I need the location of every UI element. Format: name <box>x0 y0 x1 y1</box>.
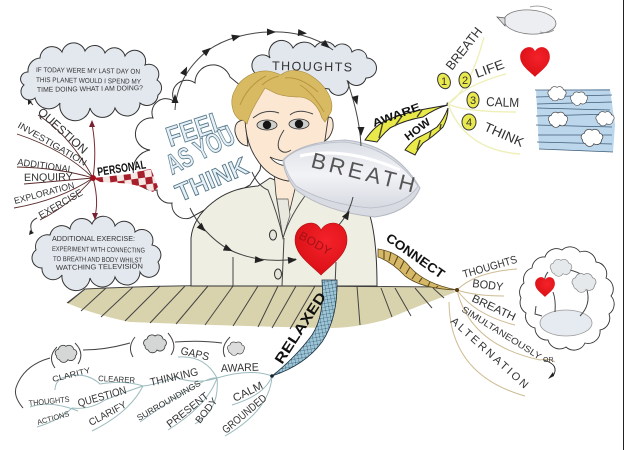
relaxed labels: GAPS <box>179 345 210 363</box>
teal branches <box>30 357 272 436</box>
numbered circles <box>435 71 479 130</box>
gold branches <box>449 269 555 396</box>
exercise text: ADDITIONAL EXERCISE: <box>52 236 135 243</box>
floor <box>67 285 456 329</box>
exercise text: WATCHING TELEVISION <box>56 263 143 272</box>
exercise text: TO BREATH AND BODY WHILST <box>53 256 143 265</box>
scaled ribbon <box>272 280 337 376</box>
panel: question cloud <box>21 43 162 121</box>
connect labels <box>448 254 554 391</box>
personal branch labels: QUESTION <box>35 105 90 157</box>
personal branch labels: EXPLORATION <box>13 180 75 206</box>
person <box>191 70 377 286</box>
brackets with thought clouds and connecting line <box>15 333 245 408</box>
relaxed labels: ACTIONS <box>36 409 70 427</box>
personal branch labels: ADDITIONAL <box>17 157 74 176</box>
label: BREATH: BREATH <box>309 148 418 197</box>
branch: aware how: 3 <box>470 95 476 107</box>
cloud: Feel As You Think <box>133 65 270 219</box>
personal branch labels: EXERCISE <box>37 187 85 222</box>
cycle arrows <box>172 28 364 264</box>
label: HOW: HOW <box>403 116 433 143</box>
face <box>245 78 330 181</box>
panel: additional exercise cloud <box>32 216 161 291</box>
relaxed labels <box>28 345 269 436</box>
relaxed labels: CLARITY <box>51 366 92 384</box>
icon: small heart <box>520 47 550 77</box>
how labels: THINK <box>482 119 527 150</box>
connect labels: SIMULTANEOUSLY <box>460 304 543 361</box>
branch: aware how <box>365 24 527 155</box>
how labels: LIFE <box>473 56 507 81</box>
arrow ribbon: aware <box>365 105 448 142</box>
label: RELAXED: RELAXED <box>271 289 329 367</box>
image border: right edge <box>623 0 624 450</box>
label: CONNECT: CONNECT <box>383 230 448 281</box>
collar and neck <box>274 172 299 238</box>
question text <box>36 67 143 94</box>
branch: aware how: 4 <box>466 117 472 129</box>
arrowheads <box>172 28 364 264</box>
connect labels: BREATH <box>470 293 517 324</box>
ears <box>235 117 333 146</box>
connect labels: ALTERNATION <box>448 315 530 391</box>
relaxed labels: CALM <box>231 380 265 405</box>
branch: connect <box>378 230 555 396</box>
relaxed labels: PRESENT <box>164 390 212 430</box>
label: AWARE: AWARE <box>371 101 422 130</box>
how labels <box>443 24 527 150</box>
personal branch labels: INVESTIGATION <box>16 120 89 168</box>
relaxed labels: THOUGHTS <box>28 395 70 408</box>
relaxed labels: AWARE <box>221 362 259 375</box>
label: BODY: BODY <box>296 228 334 258</box>
icon: small blimp <box>497 6 557 36</box>
checkered ribbon <box>93 169 158 192</box>
buttons <box>270 230 282 279</box>
relaxed labels: QUESTION <box>77 385 128 410</box>
question text: THIS PLANET WOULD I SPEND MY <box>36 77 141 86</box>
relaxed labels: CLARIFY <box>87 400 129 429</box>
yellow branches <box>448 37 520 154</box>
relaxed labels: THINKING <box>149 366 199 389</box>
nose and mouth <box>278 130 291 152</box>
cloud: Thoughts <box>252 40 377 95</box>
title: FEEL: FEEL <box>162 105 229 153</box>
relaxed labels: GROUNDED <box>220 392 269 436</box>
connect labels: BODY <box>472 278 504 294</box>
personal branch labels <box>13 105 90 222</box>
branch: relaxed <box>15 280 337 436</box>
exercise text: EXPERIMENT WITH CONNECTING <box>52 246 145 255</box>
relaxed labels: BODY <box>194 396 220 426</box>
title: AS YOU: AS YOU <box>161 120 240 180</box>
title: THINK: THINK <box>171 152 252 208</box>
eyes and brows <box>253 111 313 130</box>
question text: TIME DOING WHAT I AM DOING? <box>37 85 143 94</box>
relaxed labels: SURROUNDINGS <box>135 378 203 423</box>
arrow ribbon: how <box>405 108 448 155</box>
exercise text <box>52 236 145 272</box>
icon: sky with clouds <box>535 87 615 152</box>
label: PERSONAL: PERSONAL <box>96 157 147 179</box>
blimp: BREATH <box>283 140 420 217</box>
branch lines <box>14 115 93 220</box>
branch: aware how: 2 <box>462 75 468 87</box>
connect labels: OR <box>543 357 554 364</box>
icon: scalloped bubble with heart, clouds and plate <box>520 247 614 350</box>
gold rope ribbon <box>378 249 457 290</box>
personal branch labels: ENQUIRY <box>24 171 73 184</box>
label: THOUGHTS: THOUGHTS <box>272 59 352 74</box>
heart: BODY <box>295 223 347 275</box>
jacket <box>191 178 377 286</box>
connect labels: THOUGHTS <box>462 254 519 281</box>
question text: IF TODAY WERE MY LAST DAY ON <box>36 67 140 76</box>
branch: personal <box>13 99 158 235</box>
how labels: CALM <box>486 94 519 110</box>
branch: aware how: 1 <box>441 76 447 88</box>
relaxed labels: CLEARER <box>98 374 136 385</box>
how labels: BREATH <box>443 24 485 73</box>
hair <box>232 70 332 124</box>
